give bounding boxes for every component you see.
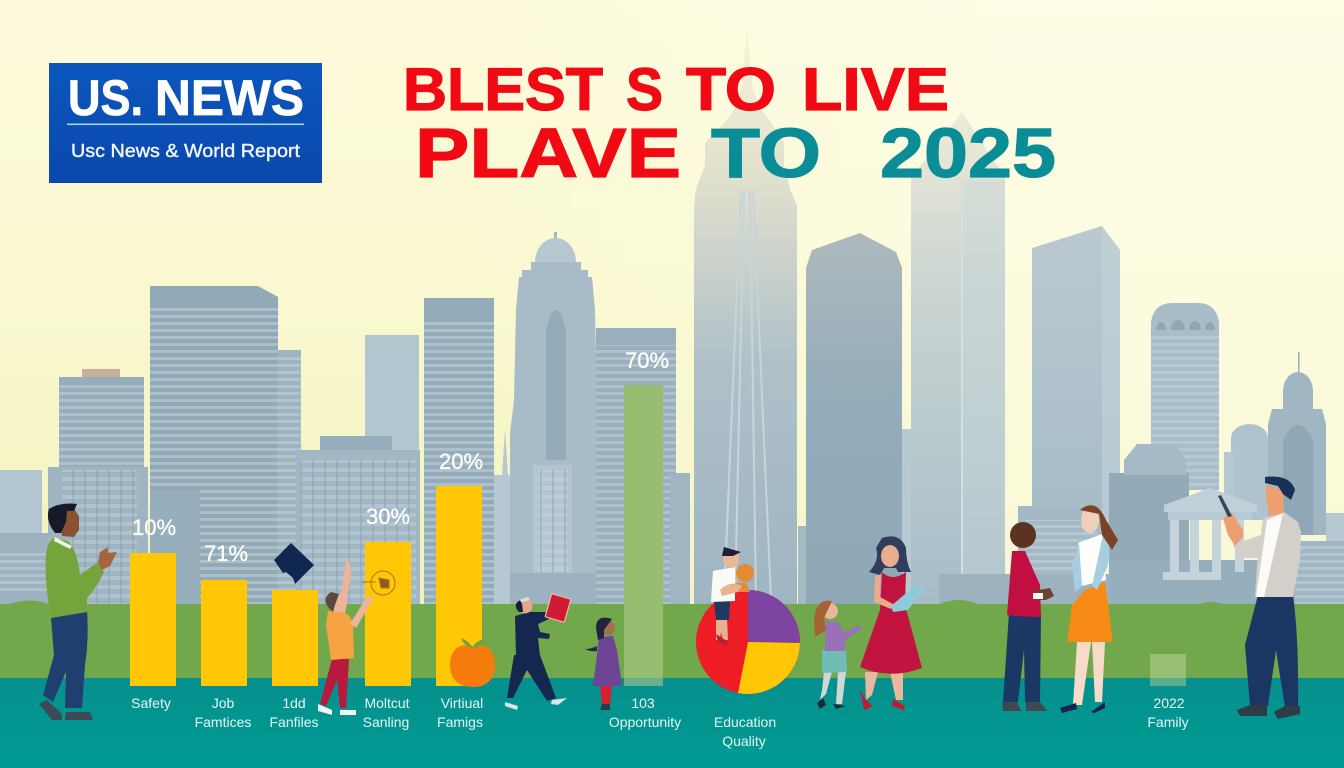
percentage labels: 70% xyxy=(625,348,669,373)
category labels: Sanling xyxy=(363,714,409,730)
graduation cap icon xyxy=(274,543,314,584)
category labels: Job xyxy=(212,695,234,711)
category labels: Fanfiles xyxy=(269,714,319,730)
logo: US. xyxy=(68,70,143,126)
title: BLEST xyxy=(403,56,603,123)
pie chart xyxy=(696,590,800,694)
person: man with red book xyxy=(505,594,571,710)
category labels: 2022 xyxy=(1153,695,1185,711)
logo xyxy=(49,63,322,183)
hedges xyxy=(10,600,1222,604)
person: man with phone xyxy=(1218,477,1301,719)
title: PLAVE xyxy=(415,114,681,192)
category labels: 103 xyxy=(631,695,655,711)
category labels: Famtices xyxy=(195,714,251,730)
category labels xyxy=(131,695,1189,749)
bank building xyxy=(1163,488,1257,580)
percentage labels: 10% xyxy=(132,515,176,540)
person: boy and child on pie xyxy=(711,547,754,646)
title: TO xyxy=(686,56,776,123)
logo: NEWS xyxy=(155,70,304,126)
title: S xyxy=(626,56,663,123)
title: LIVE xyxy=(802,56,949,123)
category labels: Quality xyxy=(722,733,766,749)
person: woman in red dress xyxy=(860,536,923,710)
logo: Usc News & World Report xyxy=(71,141,300,161)
category labels: Safety xyxy=(131,695,171,711)
person: child reaching xyxy=(318,557,375,715)
title: 2025 xyxy=(880,114,1056,192)
person: woman in orange skirt xyxy=(1060,505,1118,713)
category labels: Opportunity xyxy=(609,714,681,730)
title xyxy=(403,56,1056,192)
person: woman in red jacket xyxy=(1002,522,1054,711)
teal plaza xyxy=(0,678,1344,768)
person: man in green xyxy=(39,504,117,720)
person: girl in purple dress xyxy=(585,618,622,710)
title: TO xyxy=(711,114,821,192)
category labels: Moltcut xyxy=(364,695,410,711)
percentage labels: 71% xyxy=(204,541,248,566)
person: small girl xyxy=(814,601,861,709)
apple icon xyxy=(450,639,495,687)
percentage labels: 30% xyxy=(366,504,410,529)
skyline xyxy=(0,30,1344,605)
percentage labels: 20% xyxy=(439,449,483,474)
category labels: Family xyxy=(1147,714,1189,730)
category labels: Famigs xyxy=(437,714,483,730)
category labels: 1dd xyxy=(282,695,306,711)
lawn xyxy=(0,604,1344,679)
category labels: Virtiual xyxy=(441,695,483,711)
bar chart xyxy=(130,385,1186,686)
category labels: Education xyxy=(714,714,776,730)
percentage labels xyxy=(132,348,669,566)
ball icon xyxy=(362,571,395,595)
